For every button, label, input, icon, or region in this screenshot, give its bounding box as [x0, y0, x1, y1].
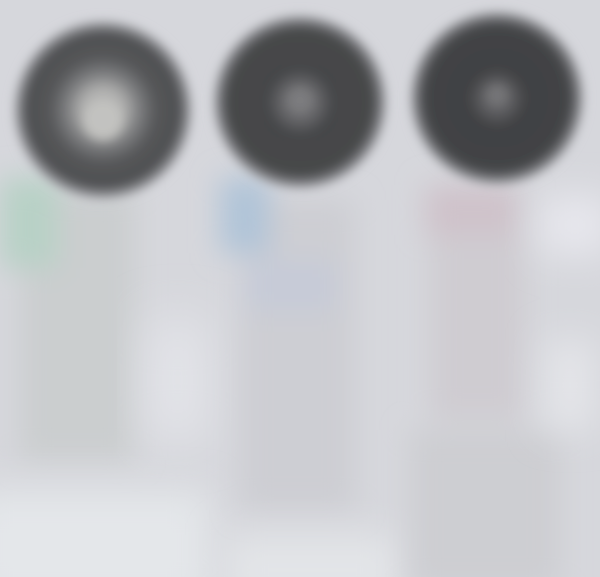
ring centre: left — [83, 100, 123, 140]
blue tint at top of centre column — [220, 178, 270, 253]
pink tint at top of right column — [425, 185, 515, 235]
panel: centre column — [220, 178, 355, 510]
ring centre: right — [486, 84, 508, 106]
panel: left column — [0, 178, 135, 460]
panel: left bottom light area — [0, 490, 210, 577]
panel: centre bottom light area — [225, 535, 400, 577]
ring: centre — [210, 12, 390, 192]
ring centre: centre — [287, 87, 313, 113]
panel: right light strip — [540, 195, 600, 430]
panel: right column — [410, 185, 560, 577]
ring: left — [11, 18, 195, 202]
lavender tint in centre column — [245, 262, 335, 310]
ring: right — [407, 8, 587, 188]
green tint at top of left column — [0, 178, 58, 268]
grey lower body of right column — [410, 430, 560, 577]
panel: left light strip — [150, 320, 205, 440]
